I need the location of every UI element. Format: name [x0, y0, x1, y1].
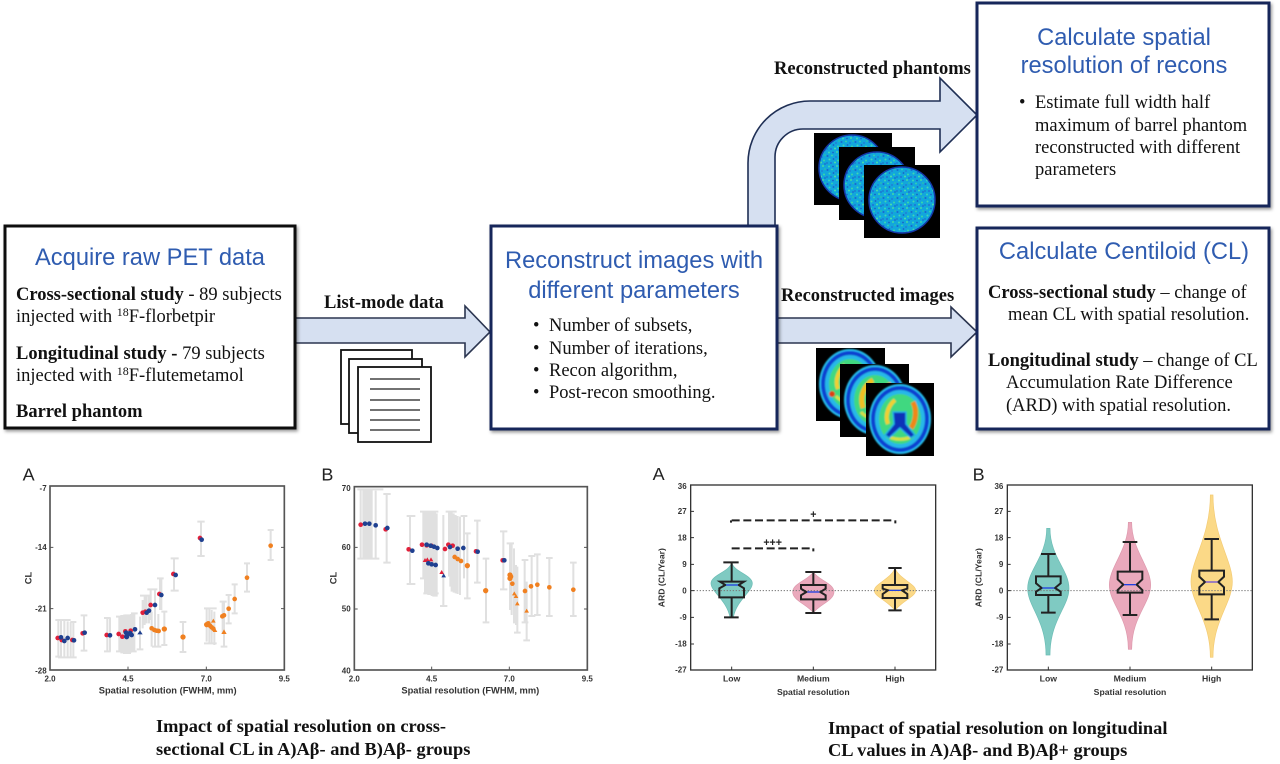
chart: longitudinal violin panel B: -9: [996, 613, 1004, 622]
caption: longitudinal charts: [828, 718, 1167, 761]
chart: longitudinal violin panel B: [973, 465, 1252, 697]
chart: longitudinal violin panel A: A: [653, 464, 665, 484]
panel: calculate spatial resolution: Calculate spatial: [1037, 25, 1211, 51]
icon: stack of documents: [341, 350, 431, 442]
chart: cross-sectional CL panel B: CL: [329, 571, 339, 584]
panel: acquire raw PET data: injected with: [16, 366, 112, 386]
caption: cross-sectional charts: sectional CL in A)Aβ- and B)Aβ- groups: [156, 739, 470, 760]
label: reconstructed images: Reconstructed images: [781, 286, 954, 306]
panel: calculate centiloid: Cross-sectional study – change of: [988, 283, 1247, 303]
panel: calculate spatial resolution: resolution of recons: [1021, 53, 1227, 79]
chart: longitudinal violin panel B: 36: [994, 482, 1004, 491]
arrow: reconstructed images: [777, 307, 977, 357]
chart: longitudinal violin panel A: -27: [675, 666, 687, 675]
chart: cross-sectional CL panel A: -21: [35, 605, 47, 614]
label: list-mode data: List-mode data: [324, 293, 444, 313]
chart: longitudinal violin panel B: 0: [999, 586, 1004, 595]
chart: longitudinal violin panel A: -18: [675, 640, 687, 649]
panel: calculate spatial resolution: Estimate full width half: [1035, 93, 1211, 113]
arrow: reconstructed phantoms: [748, 78, 977, 227]
chart: cross-sectional CL panel B: 4.5: [426, 674, 438, 683]
chart: longitudinal violin panel A: Medium: [797, 673, 830, 683]
chart: cross-sectional CL panel B: Spatial resolution (FWHM, mm): [401, 686, 539, 696]
chart: longitudinal violin panel A: Low: [723, 673, 741, 683]
panel: reconstruct images: •: [533, 361, 539, 381]
panel: reconstruct images: •: [533, 316, 539, 336]
chart: longitudinal violin panel A: [653, 464, 936, 697]
panel: calculate centiloid: [977, 228, 1269, 429]
panel: reconstruct images: Number of subsets,: [549, 316, 692, 336]
significance brackets: +++: [763, 537, 782, 549]
chart: cross-sectional CL panel A: Spatial resolution (FWHM, mm): [99, 686, 237, 696]
panel: calculate spatial resolution: maximum of barrel phantom: [1035, 116, 1248, 136]
panel: acquire raw PET data: [5, 226, 295, 428]
chart: cross-sectional CL panel B: 40: [342, 666, 351, 675]
chart: cross-sectional CL panel B: 9.5: [582, 674, 593, 683]
chart: longitudinal violin panel B: ARD (CL/Year): [973, 548, 983, 607]
significance brackets: +: [810, 509, 816, 521]
panel: calculate spatial resolution: parameters: [1035, 160, 1116, 180]
panel: reconstruct images: •: [533, 383, 539, 403]
panel: reconstruct images: Recon algorithm,: [549, 361, 677, 381]
panel: acquire raw PET data: F-flutemetamol: [129, 366, 244, 386]
icon: brain PET image stack: [816, 348, 934, 456]
icon: phantom image stack: [814, 133, 940, 238]
chart: longitudinal violin panel A: -9: [680, 613, 687, 622]
caption: longitudinal charts: CL values in A)Aβ- and B)Aβ+ groups: [828, 740, 1127, 761]
panel: acquire raw PET data: injected with: [16, 307, 112, 327]
panel: calculate centiloid: Calculate Centiloid (CL): [999, 239, 1249, 265]
caption: cross-sectional charts: Impact of spatial resolution on cross-: [156, 716, 446, 736]
chart: longitudinal violin panel B: B: [973, 465, 985, 485]
chart: cross-sectional CL panel A: 9.5: [279, 674, 290, 683]
panel: acquire raw PET data: Cross-sectional study - 89 subjects: [16, 285, 282, 305]
chart: longitudinal violin panel A: 0: [682, 586, 687, 595]
panel: reconstruct images: different parameters: [528, 278, 740, 304]
chart: cross-sectional CL panel A: A: [23, 465, 35, 485]
chart: longitudinal violin panel B: 18: [994, 533, 1004, 542]
chart: cross-sectional CL panel B: B: [321, 465, 333, 485]
chart: cross-sectional CL panel A: CL: [23, 571, 33, 584]
panel: acquire raw PET data: 18: [117, 364, 129, 378]
significance brackets: [731, 509, 895, 551]
chart: longitudinal violin panel B: -18: [992, 640, 1004, 649]
chart: longitudinal violin panel A: 36: [678, 482, 687, 491]
arrow: list-mode data: [294, 306, 490, 357]
panel: calculate centiloid: (ARD) with spatial resolution.: [1006, 396, 1231, 416]
chart: cross-sectional CL panel B: 2.0: [349, 674, 360, 683]
chart: longitudinal violin panel B: 9: [999, 560, 1004, 569]
panel: acquire raw PET data: 18: [117, 305, 129, 319]
panel: calculate spatial resolution: [977, 3, 1269, 206]
panel: calculate spatial resolution: reconstructed with different: [1035, 138, 1241, 158]
label: reconstructed phantoms: Reconstructed phantoms: [774, 59, 971, 79]
panel: acquire raw PET data: Acquire raw PET data: [35, 245, 266, 271]
chart: longitudinal violin panel B: 27: [994, 507, 1004, 516]
chart: longitudinal violin panel A: ARD (CL/Year): [657, 548, 667, 607]
chart: cross-sectional CL panel B: 60: [342, 543, 351, 552]
chart: longitudinal violin panel B: High: [1202, 673, 1221, 683]
panel: acquire raw PET data: F-florbetpir: [129, 307, 215, 327]
chart: cross-sectional CL panel B: 70: [342, 484, 351, 493]
chart: cross-sectional CL panel A: -7: [40, 484, 47, 493]
chart: cross-sectional CL panel A: -28: [35, 666, 47, 675]
chart: longitudinal violin panel B: Medium: [1114, 673, 1147, 683]
panel: reconstruct images: Reconstruct images with: [505, 248, 763, 274]
panel: calculate centiloid: Longitudinal study – change of CL: [988, 351, 1258, 371]
chart: longitudinal violin panel B: -27: [992, 666, 1004, 675]
panel: reconstruct images: Number of iterations,: [549, 339, 708, 359]
chart: longitudinal violin panel A: 18: [678, 533, 687, 542]
chart: longitudinal violin panel B: Low: [1040, 673, 1057, 683]
chart: cross-sectional CL panel B: 7.0: [504, 674, 515, 683]
chart: cross-sectional CL panel A: 4.5: [122, 674, 134, 683]
panel: reconstruct images: •: [533, 339, 539, 359]
chart: cross-sectional CL panel A: 2.0: [44, 674, 56, 683]
panel: acquire raw PET data: Barrel phantom: [16, 402, 143, 422]
chart: cross-sectional CL panel A: 7.0: [201, 674, 212, 683]
chart: cross-sectional CL panel A: -14: [35, 543, 47, 552]
chart: cross-sectional CL panel B: [321, 465, 593, 696]
chart: longitudinal violin panel A: Spatial resolution: [777, 687, 850, 697]
panel: calculate centiloid: mean CL with spatial resolution.: [1008, 305, 1249, 325]
panel: calculate spatial resolution: •: [1019, 93, 1025, 113]
caption: cross-sectional charts: [156, 716, 470, 760]
chart: longitudinal violin panel B: Spatial resolution: [1094, 687, 1166, 697]
panel: reconstruct images: [491, 226, 777, 429]
panel: reconstruct images: Post-recon smoothing.: [549, 383, 716, 403]
chart: cross-sectional CL panel A: [23, 465, 290, 696]
chart: cross-sectional CL panel B: 50: [342, 605, 351, 614]
caption: longitudinal charts: Impact of spatial resolution on longitudinal: [828, 718, 1167, 738]
panel: calculate centiloid: Accumulation Rate Difference: [1006, 373, 1233, 393]
chart: longitudinal violin panel A: 9: [682, 560, 687, 569]
chart: longitudinal violin panel A: 27: [678, 507, 687, 516]
chart: longitudinal violin panel A: High: [885, 673, 905, 683]
panel: acquire raw PET data: Longitudinal study - 79 subjects: [16, 344, 265, 364]
